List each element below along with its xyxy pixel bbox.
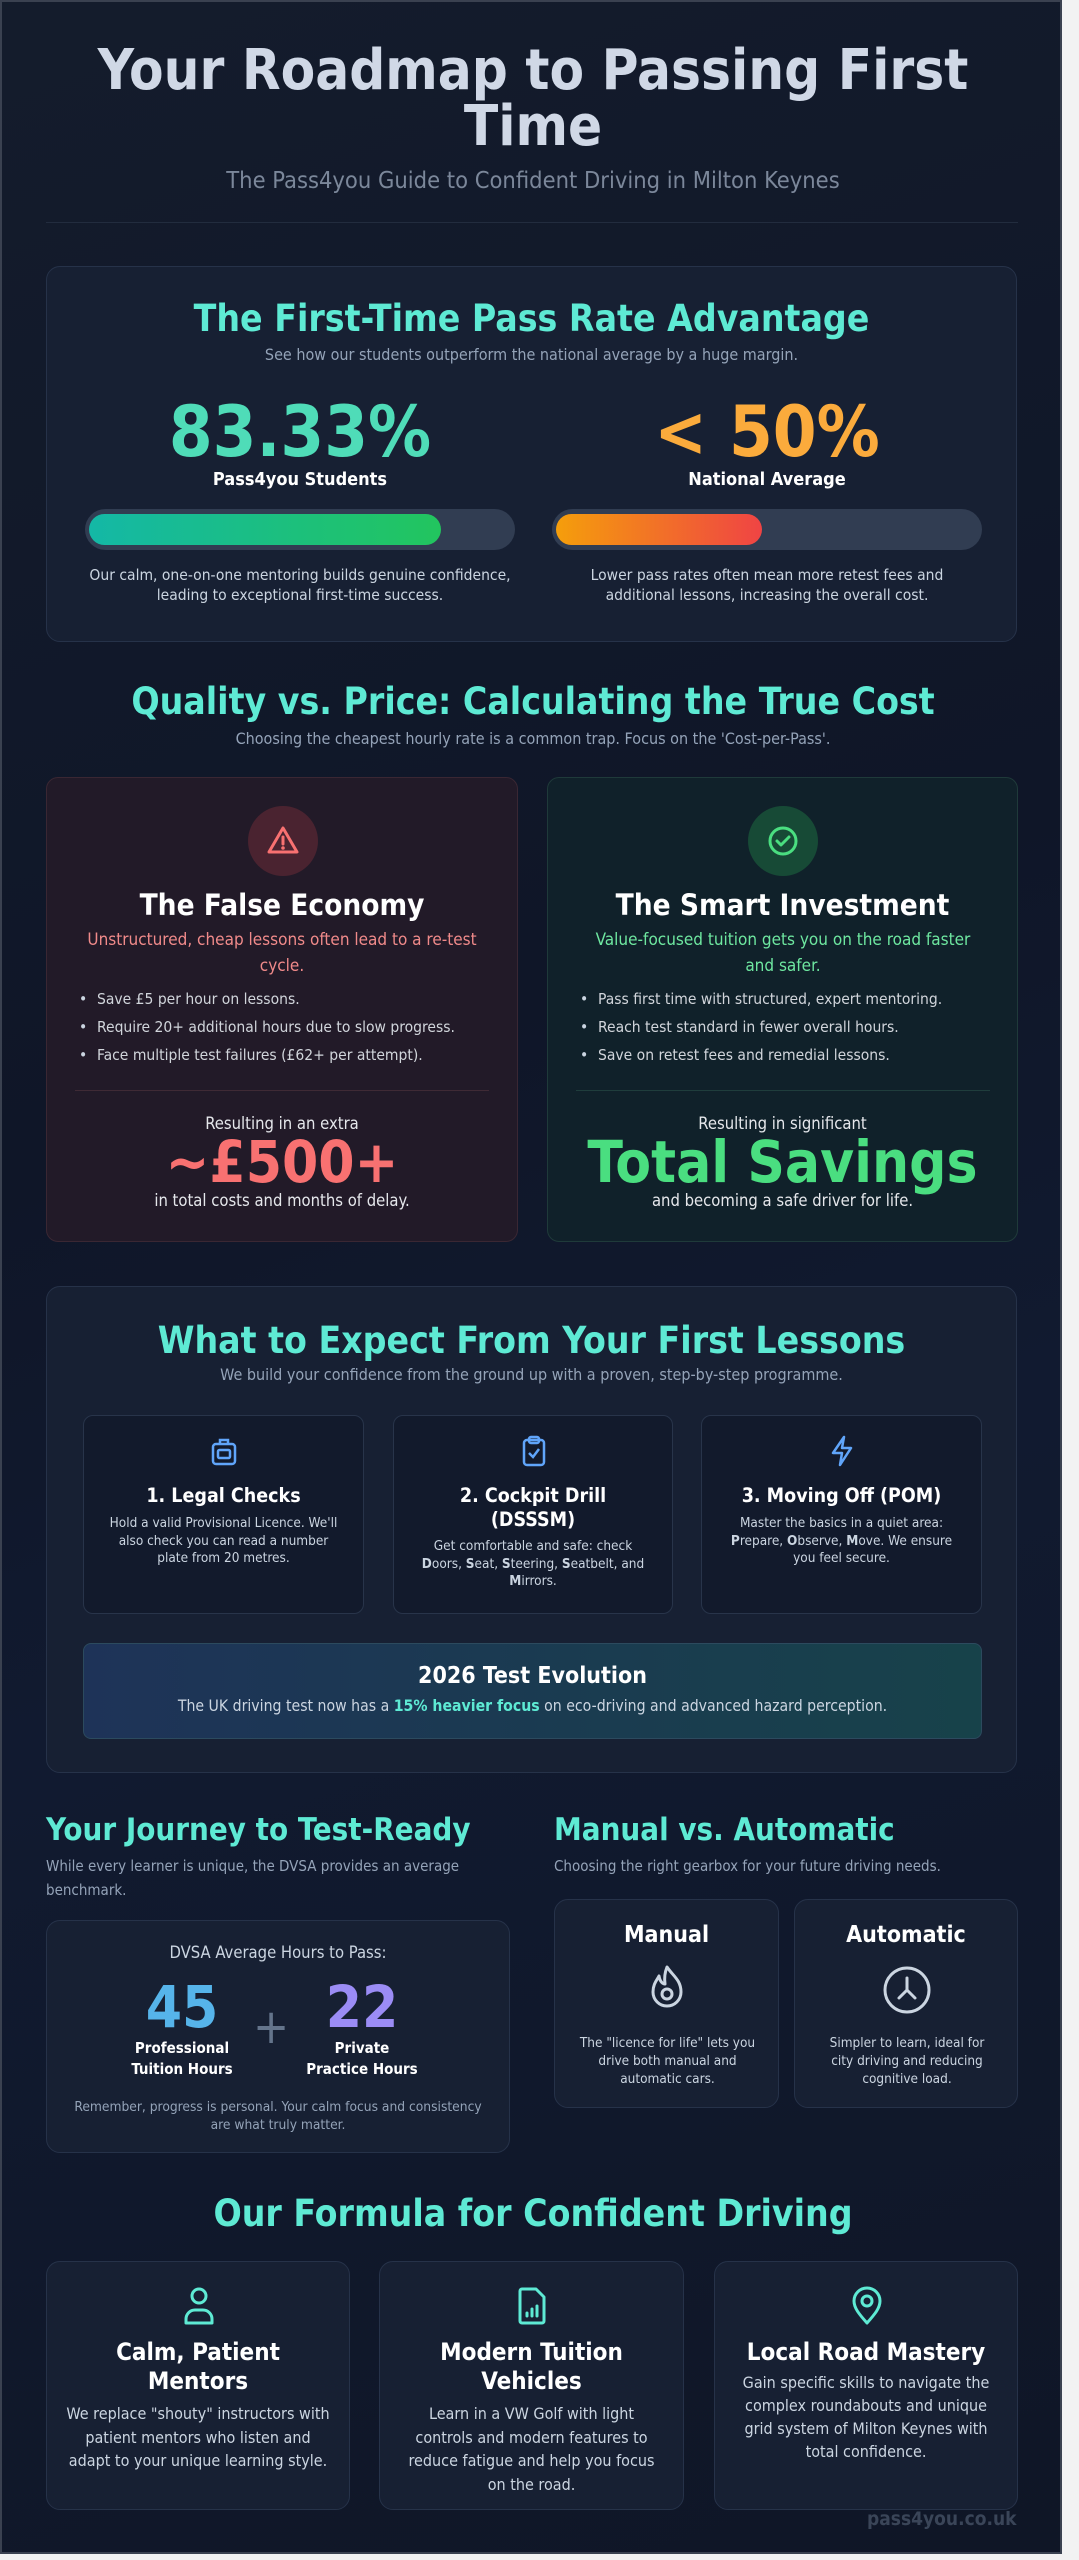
step 2: 2. Cockpit Drill [460,1484,606,1507]
result: Total Savings [587,1128,978,1196]
card title: The False Economy [140,888,424,922]
card: vehicles: Modern Tuition [440,2338,623,2366]
subheading: Choosing the cheapest hourly rate is a common trap. Focus on the 'Cost-per-Pass'. [236,729,830,748]
stat: 22: Private [335,2039,389,2057]
icon: steering [884,1966,930,2014]
stat: 45 [131,1973,233,2078]
panel: smart investment [547,777,1018,1242]
stat: 22: 22 [326,1973,398,2041]
heading: The First-Time Pass Rate Advantage [194,297,869,340]
step 2: (DSSSM) [491,1508,575,1531]
card subtitle: Unstructured, cheap lessons often lead to a re-test cycle. [87,930,477,976]
result: ~£500+ [166,1128,398,1196]
heading: manual vs automatic: Manual vs. Automatic [554,1812,895,1848]
result: Resulting in an extra [205,1114,359,1133]
icon: lightning [832,1436,852,1466]
stat: 45: Tuition Hours [131,2060,233,2078]
heading: formula: Our Formula for Confident Driving [213,2192,853,2235]
bullet list: Pass first time with structured, expert mentoring. [598,990,942,1008]
card: mentors: We replace "shouty" instructors with patient mentors who listen and adapt to your unique learning style. [66,2404,330,2470]
bullet list: Save £5 per hour on lessons. [97,990,300,1008]
card: vehicles [379,2261,684,2510]
icon: person [184,2288,214,2324]
card: manual: The "licence for life" lets you drive both manual and automatic cars. [580,2035,755,2087]
callout: 2026 test evolution: The UK driving test now has a 15% heavier focus on eco-driving and advanced hazard perception. [178,1696,887,1715]
bullet list [81,990,455,1064]
result: and becoming a safe driver for life. [652,1191,913,1210]
step 3: Master the basics in a quiet area: Prepare, Observe, Move. We ensure you feel secure. [731,1515,952,1566]
bullet list: Save on retest fees and remedial lessons. [598,1046,890,1064]
callout: 2026 test evolution [83,1643,982,1739]
icon: clipboard [522,1436,546,1466]
note: Remember, progress is personal. Your calm focus and consistency are what truly matter. [74,2099,482,2132]
card: automatic: Simpler to learn, ideal for city driving and reducing cognitive load. [830,2035,984,2087]
bullet list: Face multiple test failures (£62+ per attempt). [97,1046,423,1064]
icon: document chart [518,2288,546,2324]
subheading: See how our students outperform the national average by a huge margin. [265,345,798,364]
panel: first lessons [46,1286,1017,1773]
plus: + [253,1999,289,2055]
stat: 22: Practice Hours [306,2060,418,2078]
stat: pass4you: 83.33% [169,391,431,473]
heading: quality vs price: Quality vs. Price: Calculating the True Cost [131,680,935,723]
card: manual [554,1899,779,2108]
card: vehicles: Learn in a VW Golf with light controls and modern features to reduce fatigue and help you focus on the road. [408,2404,655,2494]
icon: map pin [852,2286,882,2325]
stat: pass4you: Pass4you Students [213,469,387,490]
heading: What to Expect From Your First Lessons [158,1319,905,1362]
step 1: 1. Legal Checks [146,1484,301,1507]
bar: pass4you [85,509,515,550]
title [97,38,968,159]
step 1: Hold a valid Provisional Licence. We'll also check you can read a number plate from 20 metres. [110,1515,337,1566]
card: local roads: Gain specific skills to navigate the complex roundabouts and unique grid system of Milton Keynes with total confidence. [743,2373,989,2461]
card subtitle: Value-focused tuition gets you on the road faster and safer. [596,930,970,976]
bullet list: Reach test standard in fewer overall hours. [598,1018,899,1036]
icon: warning [248,806,318,876]
result [154,1114,410,1210]
title: Your Roadmap to Passing First [98,38,968,103]
stat: national: < 50% [654,391,880,473]
card: mentors [46,2261,350,2510]
text: pass4you: Our calm, one-on-one mentoring builds genuine confidence, leading to exceptional first-time success. [89,566,511,604]
step 2: Get comfortable and safe: check Doors, Seat, Steering, Seatbelt, and Mirrors. [422,1538,644,1589]
step 3: 3. Moving Off (POM) [742,1484,941,1507]
panel: dvsa hours: DVSA Average Hours to Pass: [169,1943,387,1962]
text: journey sub: While every learner is unique, the DVSA provides an average benchmark. [46,1857,459,1899]
title: Time [464,94,602,159]
heading: journey: Your Journey to Test-Ready [46,1812,471,1848]
text: national: Lower pass rates often mean more retest fees and additional lessons, increasing the overall cost. [591,566,943,604]
footer: website: pass4you.co.uk [867,2508,1016,2530]
bullet list: Require 20+ additional hours due to slow progress. [97,1018,455,1036]
card: local roads [714,2261,1018,2510]
card: vehicles: Vehicles [481,2367,582,2395]
result: Resulting in significant [698,1114,867,1133]
icon: flame [652,1966,682,2008]
card: manual: Manual [624,1922,709,1948]
subtitle: The Pass4you Guide to Confident Driving in Milton Keynes [226,166,840,194]
card: automatic [794,1899,1018,2108]
card: mentors: Mentors [148,2367,248,2395]
stat: national: National Average [688,469,846,490]
card: mentors: Calm, Patient [116,2338,280,2366]
step 2 [393,1415,673,1614]
icon: check [748,806,818,876]
result: in total costs and months of delay. [154,1191,410,1210]
stat: 22 [306,1973,418,2078]
stat: 45: 45 [146,1973,218,2041]
subheading: We build your confidence from the ground up with a proven, step-by-step programme. [220,1365,843,1384]
card: automatic: Automatic [846,1922,966,1948]
card: local roads: Local Road Mastery [747,2338,985,2366]
stat: 45: Professional [135,2039,229,2057]
panel: pass rate [46,266,1017,642]
step 3 [701,1415,982,1614]
bullet list [582,990,942,1064]
callout: 2026 test evolution: 2026 Test Evolution [418,1663,647,1689]
card title: The Smart Investment [616,888,949,922]
text: gearbox sub: Choosing the right gearbox for your future driving needs. [554,1857,941,1875]
step 1 [83,1415,364,1614]
bar: national [552,509,982,550]
panel: dvsa hours [46,1920,510,2153]
panel: false economy [46,777,518,1242]
icon: id card [212,1438,236,1466]
